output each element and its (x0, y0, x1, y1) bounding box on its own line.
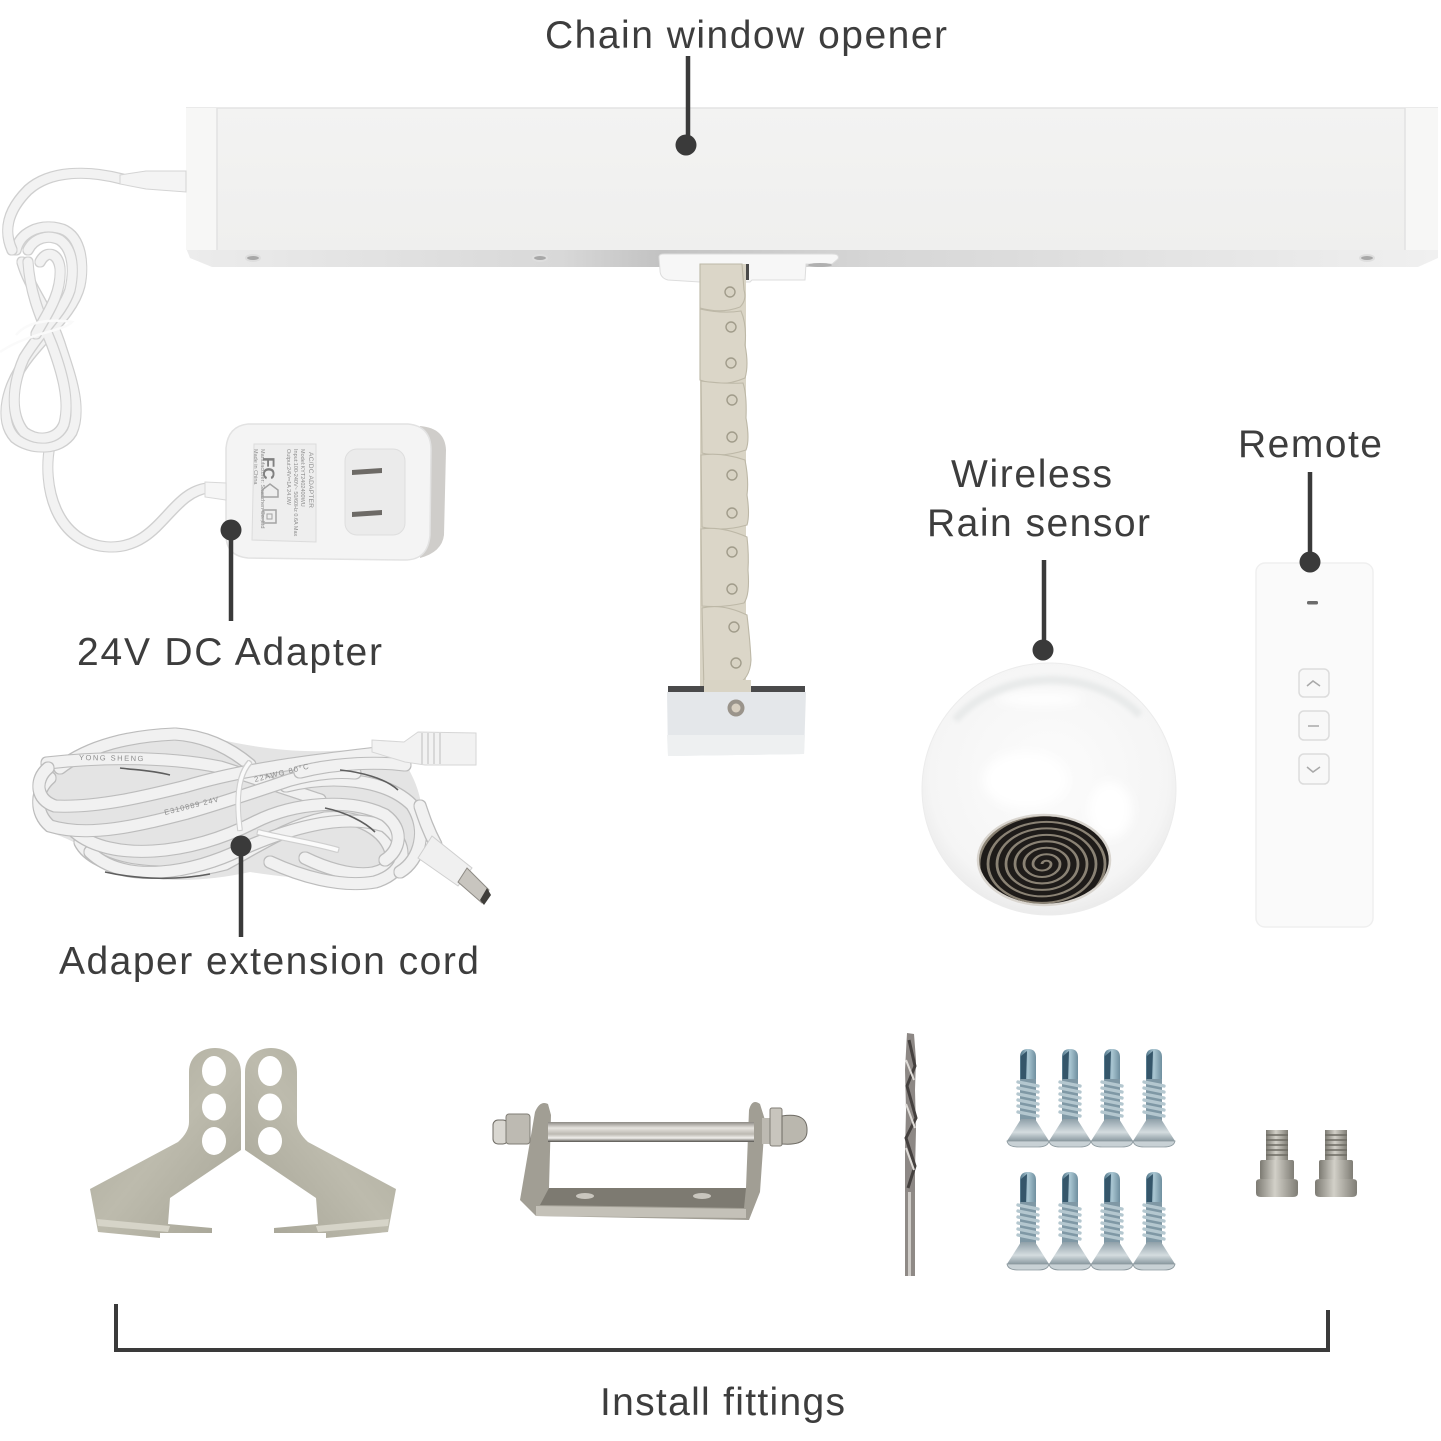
chain links (700, 264, 751, 690)
icon: extension cord: 22AWG 80°C (253, 761, 311, 784)
underside screws (246, 255, 1374, 261)
icon: self-drilling screws (1007, 1049, 1175, 1270)
left end cap (186, 108, 217, 250)
remote buttons (1299, 669, 1329, 784)
leader: extension cord (230, 836, 252, 937)
pin rod (548, 1122, 754, 1142)
icon: remote control (1256, 563, 1373, 927)
female connector (372, 732, 476, 765)
chain pins (725, 287, 741, 668)
plug prongs (352, 468, 382, 517)
rating label: Made in China (252, 449, 258, 485)
cord print: YONG SHENG (79, 753, 145, 763)
rating label: Manufacturer: Shenzhen Co.,Ltd (259, 449, 265, 528)
label: wireless rain sensor: Wireless (951, 453, 1112, 496)
leader: remote (1300, 472, 1320, 572)
icon: angle brackets (90, 1048, 396, 1238)
chain (700, 264, 751, 690)
coil strands (60, 734, 250, 768)
leader: adapter (220, 520, 242, 621)
icon: AC adapter (205, 424, 446, 560)
label: wireless rain sensor: Rain sensor (927, 502, 1150, 545)
rating label: FC (259, 457, 278, 480)
bracket: install fittings group (116, 1304, 1328, 1350)
heading: chain window opener label: Chain window opener (545, 14, 947, 57)
label: wireless rain sensor (927, 453, 1150, 545)
right end cap (1405, 108, 1438, 250)
male connector (418, 836, 491, 905)
figure eight strands (6, 227, 82, 447)
cable tie (0, 321, 72, 352)
cord tie (238, 762, 250, 830)
dark gaps between strands (105, 768, 398, 878)
cable to adapter (48, 445, 208, 547)
chain mount plate (659, 254, 838, 282)
left bracket (90, 1048, 241, 1238)
DC plug (120, 171, 186, 192)
rating label: Output:24V⎓1A 24.0W (285, 449, 291, 506)
right nut (762, 1108, 807, 1146)
leader: rain sensor (1032, 560, 1054, 660)
adapter rear shadow (420, 426, 446, 558)
label: 24V DC adapter: 24V DC Adapter (77, 631, 382, 674)
label: extension cord: Adaper extension cord (59, 940, 479, 983)
panel: chain window opener body (186, 108, 1438, 267)
icon: extension cord: E310889 24V (163, 795, 220, 817)
plug plate (345, 449, 405, 535)
rating label: AC/DC ADAPTER (307, 452, 314, 508)
rating label: Model:KYT2402400WU (299, 449, 305, 507)
leader: chain window opener (676, 56, 696, 156)
chain end bracket (667, 680, 806, 756)
gloss highlights (983, 693, 1132, 838)
label: install fittings: Install fittings (600, 1381, 845, 1424)
adapter body (226, 424, 431, 560)
icon: extension cord (36, 730, 491, 905)
strain relief (205, 482, 226, 500)
main cable (8, 173, 122, 250)
rating label (252, 444, 316, 542)
icon: power cable loop (0, 171, 208, 547)
coil backing (36, 730, 423, 880)
underside of opener (186, 248, 1438, 267)
icon: shoulder bolts (1256, 1130, 1357, 1197)
right bracket (245, 1048, 396, 1238)
left nut (493, 1114, 530, 1144)
front face (186, 108, 1438, 250)
icon: drill bit (905, 1033, 916, 1276)
spiral sensor pad (978, 815, 1114, 909)
label: remote: Remote (1238, 423, 1382, 466)
rating label: Input:100-240V~ 50/60Hz 0.6A Max (292, 449, 298, 537)
icon: rain sensor ball (922, 663, 1176, 915)
icon: pin bracket (493, 1102, 807, 1220)
status LED (1307, 601, 1318, 604)
